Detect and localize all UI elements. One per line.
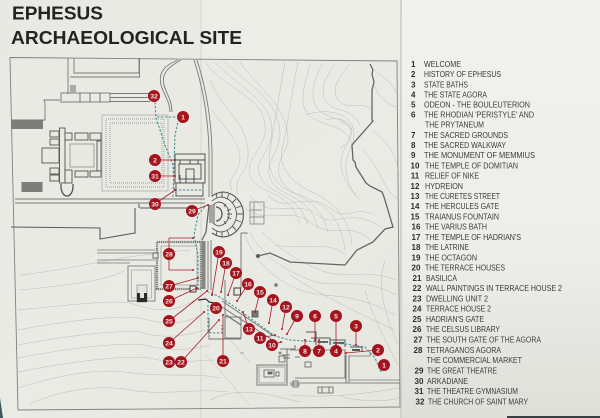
legend list: 13: [411, 192, 420, 201]
marker 22: 22: [177, 359, 185, 366]
legend list: THE CELSUS LIBRARY: [426, 324, 500, 334]
marker 22: [175, 356, 187, 368]
topographic contours: [18, 62, 399, 405]
legend list: 11: [411, 172, 420, 180]
marker 20: 20: [212, 305, 220, 312]
legend list: 3: [411, 80, 416, 89]
legend list: BASILICA: [426, 273, 457, 283]
marker 4: 4: [334, 348, 338, 355]
legend list: WALL PAINTINGS IN TERRACE HOUSE 2: [426, 283, 562, 293]
legend list: 2: [411, 70, 416, 79]
marker 7: [313, 345, 325, 357]
legend list: THE STATE AGORA: [424, 90, 487, 100]
marker 14: 14: [269, 297, 277, 304]
legend list: THE SOUTH GATE OF THE AGORA: [426, 334, 541, 344]
legend list: 1: [411, 60, 416, 69]
marker 31: [149, 170, 161, 182]
legend list: RELIEF OF NIKE: [425, 170, 479, 180]
marker 26: 26: [165, 298, 173, 305]
legend list: 27: [414, 335, 423, 344]
legend list: ARKADIANE: [427, 376, 468, 386]
marker 1 south: [378, 359, 390, 371]
legend list: 9: [411, 151, 416, 160]
legend list: 30: [415, 377, 424, 386]
marker 3: [350, 320, 362, 332]
title: EPHESUS: [12, 4, 103, 24]
legend list: 7: [411, 131, 416, 140]
legend list: WELCOME: [424, 59, 461, 69]
legend list: THE PRYTANEUM: [425, 120, 484, 130]
marker 31: 31: [151, 173, 159, 180]
legend list: THE SACRED WALKWAY: [424, 140, 506, 150]
legend list: 12: [411, 182, 420, 191]
legend list: THE THEATRE GYMNASIUM: [427, 386, 518, 396]
marker 23: [163, 356, 175, 368]
marker 27: 27: [165, 283, 173, 290]
legend list: THE COMMERCIAL MARKET: [426, 355, 522, 365]
legend list: TETRAGANOS AGORA: [426, 345, 501, 355]
legend list: TERRACE HOUSE 2: [426, 304, 491, 314]
legend list: 26: [413, 325, 422, 334]
Tetragonos agora: [97, 242, 201, 292]
marker 8: [299, 345, 311, 357]
legend list: HADRIAN'S GATE: [426, 314, 484, 324]
north road and boundary: [11, 58, 212, 239]
legend list: STATE BATHS: [424, 79, 468, 89]
marker 2 north: [149, 154, 161, 166]
legend list: 25: [413, 315, 422, 324]
legend list: THE HERCULES GATE: [425, 201, 499, 211]
marker 11: 11: [256, 335, 264, 342]
legend list: THE TERRACE HOUSES: [425, 263, 505, 273]
marker 8: 8: [303, 348, 307, 355]
marker 24: 24: [165, 340, 173, 347]
wall tower: [256, 254, 260, 258]
numbered markers: [148, 90, 390, 371]
marker 6: 6: [313, 313, 317, 320]
marker 23: 23: [165, 359, 173, 366]
legend list: 23: [413, 294, 422, 303]
marker 20: [210, 302, 222, 314]
legend list: [411, 59, 562, 406]
marker 3: 3: [354, 323, 358, 330]
marker 16: [242, 278, 254, 290]
legend list: 19: [412, 253, 421, 262]
marker 19: 19: [215, 249, 223, 256]
theatre gymnasium: [175, 154, 205, 196]
marker 32: [148, 90, 160, 102]
lower city agora complex: [240, 332, 400, 393]
legend list: THE CHURCH OF SAINT MARY: [428, 396, 528, 406]
legend list: DWELLING UNIT 2: [426, 293, 488, 303]
legend list: 22: [413, 284, 422, 293]
marker 13: 13: [245, 326, 253, 333]
marker 10: [266, 339, 278, 351]
legend list: HISTORY OF EPHESUS: [424, 69, 501, 79]
legend list: THE VARIUS BATH: [425, 222, 487, 232]
marker 6: [309, 310, 321, 322]
marker 12: [280, 301, 292, 313]
marker 4: [330, 345, 342, 357]
legend list: TRAIANUS FOUNTAIN: [425, 212, 499, 222]
legend list: 6: [411, 110, 416, 120]
marker 1 south: 1: [382, 362, 386, 369]
marker 13: [243, 323, 255, 335]
marker 29: 29: [188, 208, 196, 215]
marker 18: 18: [222, 260, 230, 267]
marker 30: 30: [151, 201, 159, 208]
marker 21: 21: [219, 358, 227, 365]
great theatre: [209, 192, 243, 237]
marker 14: [267, 294, 279, 306]
marker 1 north: 1: [181, 114, 185, 121]
marker 5: [330, 310, 342, 322]
legend list: THE RHODIAN 'PERISTYLE' AND: [424, 110, 534, 120]
legend list: THE MONUMENT OF MEMMIUS: [424, 150, 535, 160]
marker 11: [254, 332, 266, 344]
title: ARCHAEOLOGICAL SITE: [11, 28, 242, 48]
legend list: 8: [411, 141, 416, 150]
marker 15: [254, 286, 266, 298]
legend list: THE OCTAGON: [425, 252, 477, 262]
marker 24: [163, 337, 175, 349]
legend list: 16: [412, 223, 421, 232]
legend list: 31: [415, 387, 424, 396]
gymnasium: [42, 128, 101, 196]
marker 9: 9: [295, 313, 299, 320]
legend list: 20: [412, 264, 421, 273]
legend list: ODEON - THE BOULEUTERION: [424, 100, 530, 110]
legend list: 17: [412, 233, 421, 242]
legend list: THE TEMPLE OF HADRIAN'S: [425, 232, 521, 242]
marker 16: 16: [244, 281, 252, 288]
visitor route dashed: [155, 102, 381, 372]
marker 15: 15: [256, 289, 264, 296]
legend list: THE LATRINE: [425, 242, 469, 252]
legend list: 5: [411, 100, 416, 110]
marker 17: 17: [232, 270, 240, 277]
marker 9: [291, 310, 303, 322]
legend list: 4: [411, 90, 416, 100]
legend list: THE SACRED GROUNDS: [424, 130, 508, 140]
legend list: THE TEMPLE OF DOMITIAN: [425, 160, 518, 170]
legend list: HYDREION: [425, 181, 463, 191]
marker 25: 25: [165, 318, 173, 325]
dotted square enclosure: [102, 115, 168, 191]
title: [11, 4, 242, 48]
marker 2 south: 2: [376, 347, 380, 354]
marker 2 south: [372, 344, 384, 356]
legend list: 18: [412, 243, 421, 252]
marker 2 north: 2: [153, 157, 157, 164]
marble street: [198, 205, 214, 303]
legend list: THE CURETES STREET: [425, 191, 500, 201]
marker 28: [163, 248, 175, 260]
marker 30: [149, 198, 161, 210]
legend list: 14: [411, 202, 420, 211]
marker 17: [230, 267, 242, 279]
marker 5: 5: [334, 313, 338, 320]
marker 7: 7: [317, 348, 321, 355]
marker 10: 10: [268, 342, 276, 349]
legend list: 28: [414, 346, 423, 355]
building east of theatre: [250, 202, 264, 224]
city wall: [258, 64, 393, 265]
marker 32: 32: [150, 93, 158, 100]
marker 28: 28: [165, 251, 173, 258]
marker 21: [217, 355, 229, 367]
marker 29: [186, 205, 198, 217]
legend list: 29: [415, 366, 424, 376]
legend list: THE GREAT THEATRE: [427, 366, 497, 376]
hatched blocks: [11, 120, 43, 192]
marker 12: 12: [282, 304, 290, 311]
Serapis temple: [128, 266, 155, 302]
Curetes street and terrace houses: [209, 233, 278, 339]
legend list: 21: [413, 274, 422, 283]
map frame: [10, 58, 400, 410]
marker 19: [213, 246, 225, 258]
marker 18: [220, 257, 232, 269]
marker 26: [163, 295, 175, 307]
marker 27: [163, 280, 175, 292]
legend list: 24: [413, 304, 422, 314]
marker 1 north: [177, 111, 189, 123]
legend list: 10: [411, 161, 420, 170]
legend list: 32: [416, 398, 425, 406]
marker 25: [163, 315, 175, 327]
legend list: 15: [411, 212, 420, 222]
red leaders: [155, 159, 378, 362]
church of Saint Mary: [61, 85, 150, 102]
